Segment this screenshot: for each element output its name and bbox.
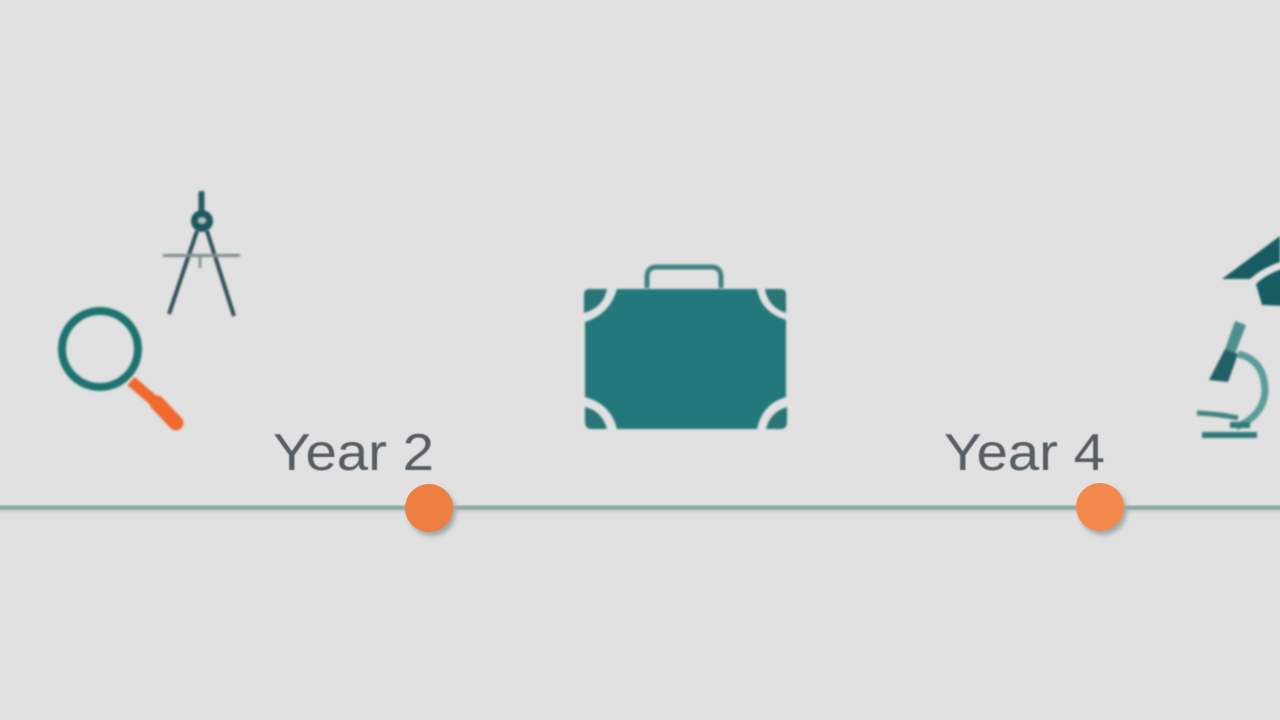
icon: briefcase: [584, 267, 787, 429]
label: Year 2: Year 2: [273, 424, 434, 482]
label: Year 4: Year 4: [944, 424, 1105, 482]
icon: microscope: [1197, 321, 1265, 435]
marker: Year 4: [1076, 483, 1127, 535]
icon: magnifying glass: [62, 311, 176, 423]
icon: compass: [163, 191, 240, 316]
marker: Year 2: [405, 484, 456, 536]
icon: graduation cap: [1222, 236, 1280, 306]
timeline: [0, 506, 1280, 513]
